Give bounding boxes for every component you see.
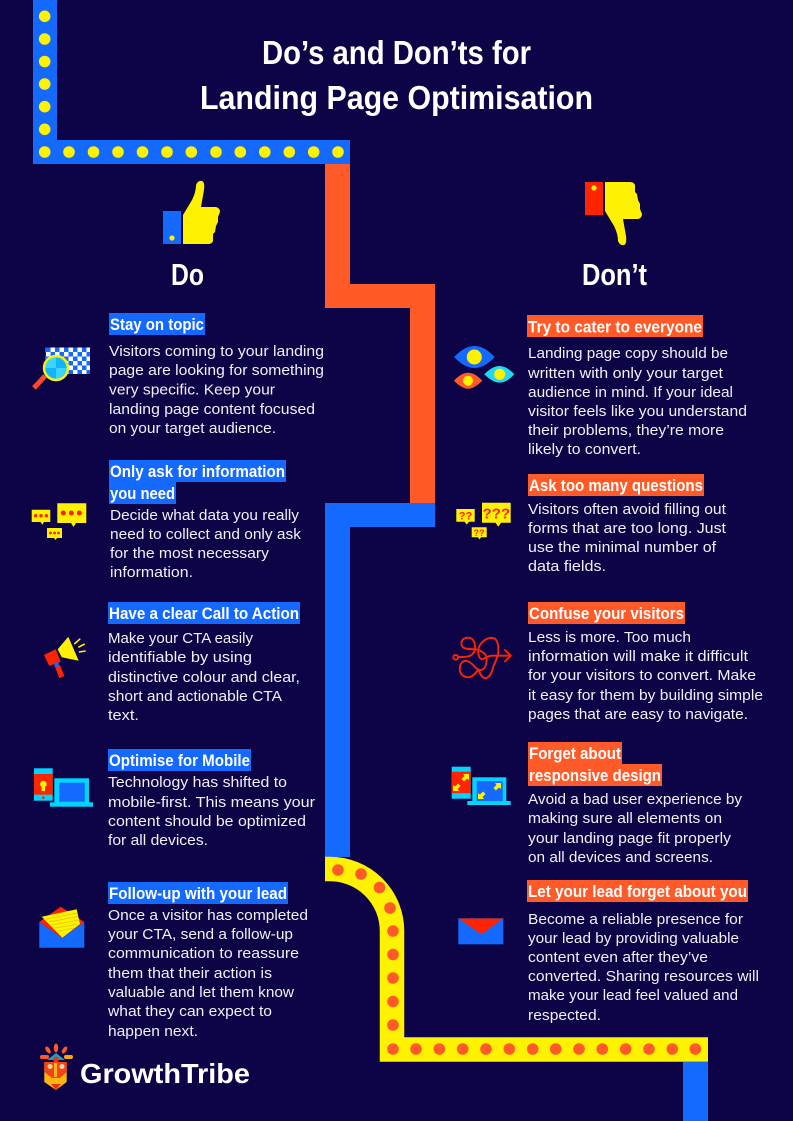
connector track: yellow dotted curve [325, 864, 708, 1055]
body text: short and actionable CTA [108, 688, 282, 705]
body text [528, 791, 742, 866]
panel: do 2 only ask for information [32, 460, 302, 581]
body text: Once a visitor has completed [108, 907, 308, 924]
icon: three eyes [454, 346, 514, 389]
body text: respected. [528, 1007, 601, 1024]
body text [107, 907, 308, 1040]
body text: them that their action is [108, 965, 272, 982]
body text: happen next. [108, 1023, 198, 1040]
heading: Confuse your visitors [529, 604, 684, 623]
heading: Have a clear Call to Action [109, 604, 299, 623]
body text: for the most necessary [110, 545, 270, 562]
connector track: orange segment [325, 164, 435, 503]
body text [528, 629, 763, 723]
body text: on all devices and screens. [528, 849, 713, 866]
body text: page are looking for something [109, 362, 324, 379]
body text: content should be optimized [108, 813, 306, 830]
body text: audience in mind. If your ideal [528, 384, 733, 401]
body text: your landing page fit properly [528, 830, 732, 847]
title: Landing Page Optimisation [200, 79, 593, 116]
body text: landing page content focused [109, 401, 315, 418]
body text [110, 507, 302, 581]
body text: forms that are too long. Just [528, 520, 727, 537]
logo emblem [40, 1044, 73, 1090]
body text: use the minimal number of [528, 539, 717, 556]
heading: Don't: Don’t [582, 257, 647, 292]
heading [528, 742, 662, 786]
body text [108, 630, 300, 724]
panel: do 4 optimise for mobile [34, 749, 315, 849]
panel: do 1 stay on topic [34, 313, 324, 437]
body text: your CTA, send a follow-up [108, 926, 293, 943]
body text: information will make it difficult [528, 648, 749, 665]
heading: you need [110, 484, 175, 503]
heading: Let your lead forget about you [528, 882, 747, 901]
body text: pages that are easy to navigate. [528, 706, 748, 723]
body text: very specific. Keep your [109, 382, 275, 398]
body text: Landing page copy should be [528, 345, 728, 362]
heading: Do: Do [171, 257, 204, 292]
body text: distinctive colour and clear, [108, 669, 300, 686]
icon: phone and laptop [34, 768, 93, 807]
panel: don't 4 forget responsive design [452, 742, 742, 866]
icon: open envelope with letter [39, 907, 84, 948]
heading: responsive design [529, 766, 661, 785]
body text: identifiable by using [108, 649, 252, 666]
panel: don't 3 confuse your visitors [453, 602, 763, 723]
body text: for all devices. [108, 832, 208, 849]
body text: likely to convert. [528, 441, 641, 458]
body text: data fields. [528, 558, 606, 575]
body text: Decide what data you really [110, 507, 300, 524]
icon: tangled arrow [453, 638, 511, 678]
panel: do 3 clear call to action [44, 602, 300, 724]
body text: Visitors coming to your landing [109, 343, 324, 360]
body text: converted. Sharing resources will [528, 968, 759, 985]
panel: don't 2 ask too many questions [456, 474, 727, 575]
heading: Forget about [529, 744, 621, 763]
icon: question bubbles [456, 503, 511, 540]
body text [527, 345, 747, 458]
panel: do 5 follow-up with your lead [39, 882, 308, 1040]
body text: Technology has shifted to [108, 774, 287, 791]
icon: question bubbles: ?? [459, 510, 472, 522]
body text: Make your CTA easily [108, 630, 253, 647]
icon: speech bubbles [32, 503, 86, 540]
panel: don't 5 let your lead forget [458, 880, 759, 1024]
body text: Become a reliable presence for [528, 911, 743, 928]
body text [528, 911, 759, 1024]
heading: Only ask for information [110, 462, 285, 481]
body text: visitor feels like you understand [528, 403, 747, 420]
body text: making sure all elements on [528, 810, 722, 827]
body text: content even after they’ve [528, 949, 708, 966]
heading: Ask too many questions [529, 476, 703, 495]
body text: valuable and let them know [108, 984, 294, 1001]
body text: on your target audience. [109, 420, 276, 437]
body text: for your visitors to convert. Make [528, 667, 756, 684]
body text [108, 774, 315, 849]
icon: megaphone [44, 637, 86, 678]
icon: closed envelope [458, 918, 503, 944]
heading [109, 460, 286, 504]
logo wordmark: GrowthTribe [80, 1058, 250, 1089]
connector track: blue segment [325, 503, 435, 857]
connector track: blue dotted start [33, 0, 350, 164]
body text: make your lead feel valued and [528, 987, 738, 1004]
body text [109, 343, 324, 437]
body text [528, 501, 727, 575]
icon: magnifying glass [34, 348, 90, 388]
title [200, 34, 593, 116]
body text: it easy for them by building simple [528, 687, 763, 704]
body text: text. [108, 707, 139, 724]
icon: thumbs up [163, 181, 220, 244]
icon: responsive devices [452, 767, 511, 805]
icon: question bubbles: ?? [474, 528, 484, 538]
body text: your lead by providing valuable [528, 930, 739, 947]
body text: mobile-first. This means your [108, 794, 315, 811]
heading: Try to cater to everyone [528, 318, 702, 336]
body text: information. [110, 564, 193, 581]
icon: question bubbles: ??? [483, 506, 510, 522]
body text: their problems, they’re more [528, 422, 724, 439]
body text: need to collect and only ask [110, 526, 302, 543]
body text: communication to reassure [108, 945, 299, 962]
heading: Optimise for Mobile [109, 751, 250, 770]
heading: Stay on topic [110, 315, 204, 334]
icon: thumbs down [585, 182, 642, 245]
body text: Avoid a bad user experience by [528, 791, 742, 808]
heading: Follow-up with your lead [109, 884, 287, 903]
body text: Less is more. Too much [528, 629, 691, 646]
body text: Visitors often avoid filling out [528, 501, 727, 518]
logo: GrowthTribe [40, 1044, 250, 1090]
title: Do’s and Don’ts for [262, 34, 531, 71]
connector track: blue exit [683, 1062, 708, 1121]
body text: written with only your target [527, 365, 724, 382]
body text: what they can expect to [107, 1003, 272, 1020]
panel: don't 1 try to cater to everyone [454, 315, 747, 458]
